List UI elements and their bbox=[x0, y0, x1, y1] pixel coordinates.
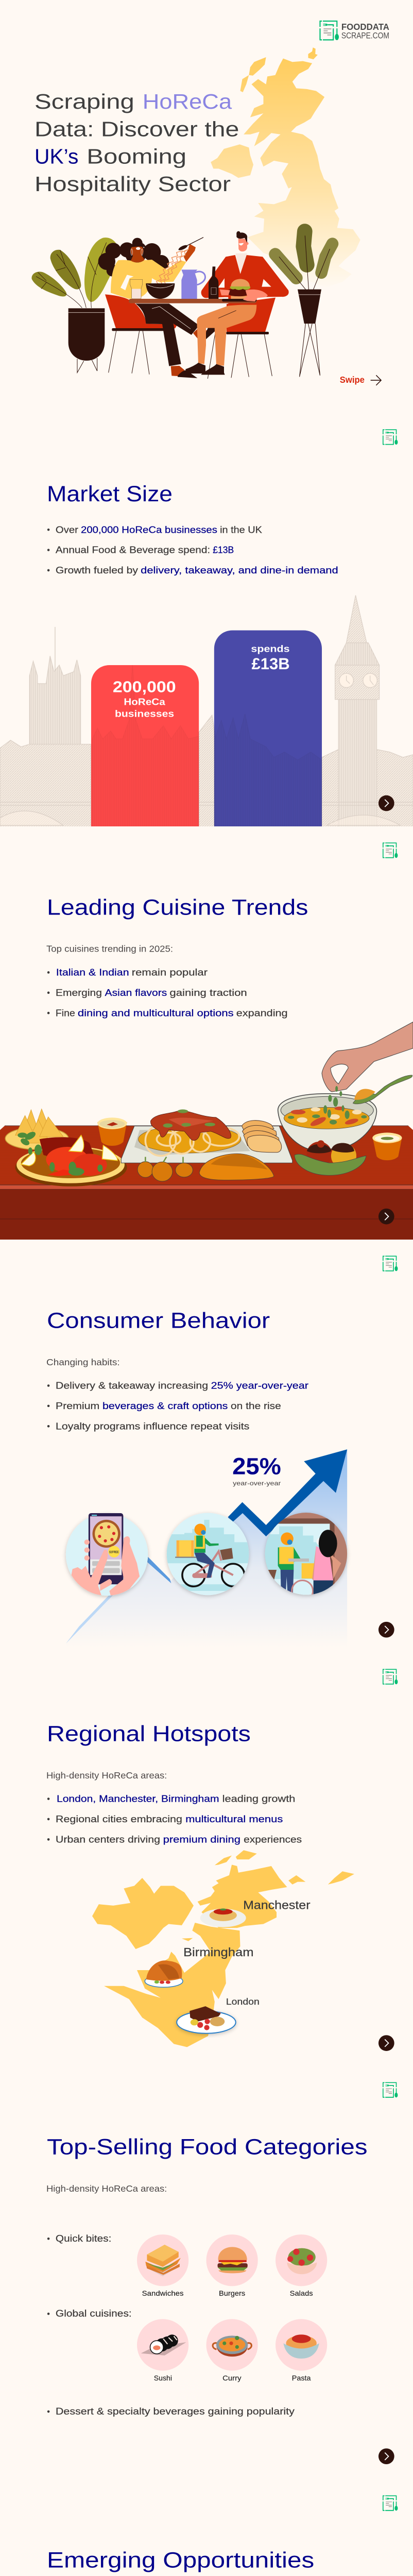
label: Burgers bbox=[219, 2290, 245, 2297]
scene: order on phone bbox=[66, 1513, 148, 1596]
burger and plate bbox=[220, 279, 268, 301]
bullets: Regional cities embracing bbox=[56, 1814, 182, 1825]
illustration: food spread bbox=[5, 1022, 413, 1187]
noodles bbox=[156, 249, 189, 287]
logo icon bbox=[383, 2082, 398, 2098]
sliced bread bbox=[242, 1121, 282, 1153]
heading: Regional Hotspots bbox=[47, 1722, 251, 1747]
icon: pasta bbox=[276, 2319, 327, 2371]
bullets: Delivery & takeaway increasing bbox=[56, 1381, 208, 1392]
logo icon bbox=[383, 1256, 398, 1272]
logo icon bbox=[383, 2495, 398, 2511]
table bbox=[0, 1126, 413, 1240]
bullets: £13B bbox=[213, 545, 234, 556]
scene: bike courier bbox=[167, 1513, 249, 1595]
right potted plant bbox=[275, 231, 332, 377]
bullets: Quick bites: bbox=[56, 2233, 111, 2244]
label: 200,000 HoReCa businesses: 200,000 bbox=[113, 678, 176, 696]
hero title: Booming bbox=[87, 145, 186, 168]
plant pot bbox=[68, 308, 105, 372]
bullets: delivery, takeaway, and dine-in demand bbox=[141, 565, 338, 576]
label: 200,000 HoReCa businesses bbox=[113, 678, 176, 719]
icon: burgers bbox=[206, 2234, 258, 2286]
bullets: Urban centers driving bbox=[56, 1834, 160, 1845]
bullets: Over bbox=[56, 524, 78, 535]
label: spends 13B: £13B bbox=[251, 654, 290, 673]
small oranges bbox=[137, 1157, 193, 1181]
scene: delivery at door bbox=[265, 1513, 347, 1601]
icon: sandwiches bbox=[137, 2234, 188, 2286]
curry bowl bbox=[278, 1086, 376, 1149]
hero title: UK’s bbox=[35, 145, 78, 168]
glass of milk bbox=[130, 279, 143, 299]
label: 200,000 HoReCa businesses: businesses bbox=[115, 708, 174, 719]
stat: 25 percent: year-over-year bbox=[233, 1480, 281, 1487]
bullets bbox=[47, 524, 338, 576]
blue jug bbox=[181, 269, 205, 300]
arrow lower segment bbox=[146, 1557, 171, 1583]
bullets: premium dining bbox=[163, 1834, 240, 1845]
city labels: Birmingham bbox=[183, 1945, 254, 1959]
intro text: High-density HoReCa areas: bbox=[46, 1770, 167, 1781]
panel: cuisine trends bbox=[0, 842, 413, 1240]
bullets: Asian flavors bbox=[105, 988, 167, 998]
panel: emerging opportunities bbox=[47, 2496, 398, 2573]
heading: Consumer Behavior bbox=[47, 1308, 270, 1333]
bullets bbox=[47, 968, 288, 1019]
city labels: London bbox=[226, 1996, 260, 2007]
intro text: Changing habits: bbox=[46, 1357, 120, 1367]
bar: spends 13B bbox=[214, 631, 322, 827]
bread loaf bbox=[199, 1154, 274, 1180]
intro text: Top cuisines trending in 2025: bbox=[46, 944, 173, 954]
spaghetti bbox=[139, 1109, 241, 1156]
label: Sandwiches bbox=[142, 2290, 184, 2297]
panel: consumer behavior bbox=[46, 1256, 398, 1643]
label: 200,000 HoReCa businesses: HoReCa bbox=[124, 697, 165, 707]
icon: sushi bbox=[137, 2319, 188, 2371]
samosas bbox=[5, 1109, 68, 1149]
bullets: Growth fueled by bbox=[56, 565, 139, 576]
label: Pasta bbox=[292, 2374, 311, 2382]
bar: 200,000 businesses bbox=[91, 665, 199, 827]
bullets: expanding bbox=[236, 1008, 288, 1019]
soup bowl bbox=[146, 283, 175, 299]
heading: Emerging Opportunities bbox=[47, 2548, 314, 2573]
illustration: couple dining bbox=[32, 231, 289, 379]
serving tray bbox=[121, 1126, 292, 1163]
bullets: dining and multicultural options bbox=[78, 1008, 234, 1019]
logo with wordmark bbox=[319, 21, 389, 41]
bullets bbox=[47, 1794, 302, 1845]
bullets: 25% year-over-year bbox=[211, 1381, 308, 1392]
bullets: gaining traction bbox=[169, 988, 247, 998]
next arrow button bbox=[378, 1622, 394, 1638]
plate: London bbox=[177, 2006, 236, 2033]
woman bbox=[98, 238, 219, 378]
logo icon bbox=[383, 1669, 398, 1685]
next arrow button bbox=[378, 2035, 394, 2051]
hero title: Hospitality Sector bbox=[35, 172, 231, 196]
table top bbox=[129, 299, 256, 303]
next arrow button bbox=[378, 795, 394, 811]
plate: Birmingham bbox=[145, 1960, 183, 1987]
label: spends 13B bbox=[251, 643, 290, 673]
intro text: High-density HoReCa areas: bbox=[46, 2183, 167, 2194]
hero title bbox=[35, 90, 239, 196]
icon: curry bbox=[206, 2319, 258, 2371]
bullets: beverages & craft options bbox=[102, 1401, 228, 1412]
label: spends 13B: spends bbox=[251, 643, 290, 654]
heading: Leading Cuisine Trends bbox=[47, 895, 308, 920]
UK map silhouette bbox=[211, 47, 360, 287]
woman's chair bbox=[105, 294, 178, 375]
heading: Market Size bbox=[47, 482, 173, 506]
bullets: 200,000 HoReCa businesses bbox=[81, 524, 217, 535]
bullets: multicultural menus bbox=[185, 1814, 283, 1825]
label: Salads bbox=[290, 2290, 313, 2297]
logo icon bbox=[383, 842, 398, 858]
bullets: remain popular bbox=[132, 968, 208, 978]
swipe prompt bbox=[340, 375, 381, 385]
next arrow button bbox=[378, 2448, 394, 2464]
area under arrow bbox=[66, 1449, 347, 1648]
label: Sushi bbox=[154, 2374, 172, 2382]
panel: market size bbox=[0, 429, 413, 2462]
logo icon bbox=[383, 429, 398, 445]
bullets: Emerging bbox=[56, 988, 102, 998]
hero title: Data: Discover the bbox=[35, 117, 239, 141]
bullets: Global cuisines: bbox=[56, 2309, 132, 2319]
panel: hero bbox=[32, 21, 389, 385]
grilled meat plate bbox=[15, 1136, 127, 1187]
logo with wordmark: FOODDATA bbox=[341, 22, 389, 32]
next arrow button bbox=[378, 1209, 394, 1224]
bullets: leading growth bbox=[222, 1794, 295, 1805]
wine bottle bbox=[209, 266, 218, 300]
bullets bbox=[47, 2233, 295, 2417]
bullets: London, Manchester, Birmingham bbox=[57, 1794, 219, 1805]
desserts in green bowl bbox=[295, 1140, 366, 1175]
green spoon bbox=[353, 1075, 412, 1104]
swipe prompt: Swipe bbox=[340, 375, 365, 385]
bullets: Annual Food & Beverage spend: bbox=[56, 545, 210, 556]
city labels bbox=[183, 1898, 311, 2007]
hand and arm bbox=[322, 1022, 413, 1092]
bullets: Fine bbox=[56, 1008, 75, 1019]
hero title: HoReCa bbox=[143, 90, 232, 113]
chart: growth arrow with delivery scenes bbox=[66, 1449, 347, 1648]
label: Curry bbox=[222, 2374, 242, 2382]
hero title: Scraping bbox=[35, 90, 134, 113]
bullets: Loyalty programs influence repeat visits bbox=[56, 1421, 249, 1432]
arrow bbox=[228, 1449, 347, 1536]
stat: 25 percent: 25% bbox=[232, 1453, 281, 1479]
man's chair bbox=[208, 298, 276, 379]
bullets: experiences bbox=[244, 1834, 302, 1845]
bullets: Premium bbox=[56, 1401, 99, 1412]
bullets: Dessert & specialty beverages gaining popularity bbox=[56, 2406, 295, 2417]
bullets: Italian & Indian bbox=[56, 968, 129, 978]
scene: order on phone: $1FREE bbox=[109, 1550, 119, 1554]
logo with wordmark: SCRAPE.COM bbox=[341, 31, 389, 41]
icon: salads bbox=[276, 2234, 327, 2286]
panel: top-selling food categories bbox=[46, 2082, 398, 2464]
bullets: in the UK bbox=[220, 524, 262, 535]
bullets bbox=[47, 1381, 308, 1432]
bullets: on the rise bbox=[231, 1401, 281, 1412]
finger gap bbox=[331, 1064, 348, 1084]
sketch of London skyline bbox=[0, 595, 413, 827]
panel: regional hotspots bbox=[46, 1669, 398, 2051]
cups bbox=[97, 1117, 402, 1160]
heading: Top-Selling Food Categories bbox=[47, 2135, 368, 2160]
plate: Manchester bbox=[200, 1908, 246, 1927]
left plant leaves bbox=[32, 238, 116, 308]
city labels: Manchester bbox=[243, 1898, 311, 1911]
man bbox=[185, 231, 289, 375]
UK map bbox=[92, 1850, 354, 2047]
